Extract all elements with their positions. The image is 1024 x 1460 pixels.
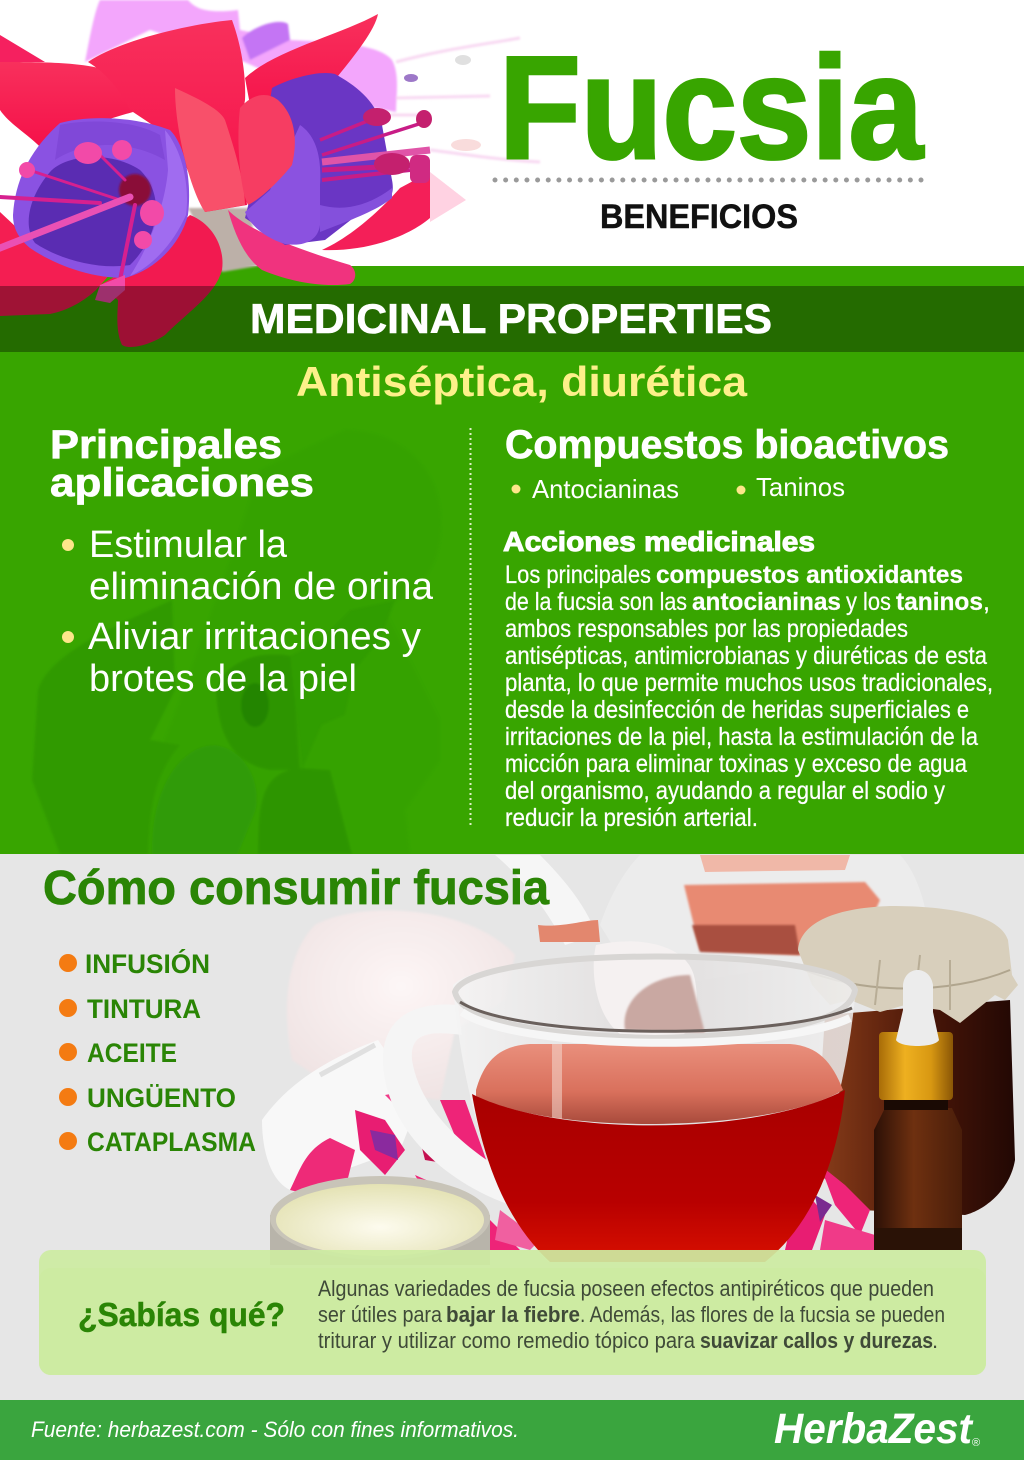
- text block: acciones medicinales: ,: [983, 588, 990, 616]
- heading: principales aplicaciones: [50, 423, 314, 505]
- soft shadow under flowers: [188, 208, 258, 272]
- callout heading: ¿Sabías qué?: [78, 1296, 285, 1333]
- text block: acciones medicinales: antocianinas: [692, 588, 841, 616]
- list: formas de consumo: CATAPLASMA: [87, 1127, 256, 1157]
- text block: acciones medicinales: y los: [846, 588, 891, 616]
- right purple flower: [245, 73, 393, 245]
- callout text: . Además, las flores de la fucsia se pueden: [580, 1302, 945, 1327]
- callout text: suavizar callos y durezas: [700, 1328, 933, 1353]
- right flower anthers: [363, 108, 432, 183]
- white header background: [0, 0, 1024, 266]
- callout text: ser útiles para: [318, 1302, 443, 1327]
- list: formas de consumo: UNGÜENTO: [87, 1083, 236, 1113]
- callout text: bajar la fiebre: [446, 1302, 580, 1327]
- lower bright petal: [228, 210, 355, 285]
- header band: medicinal properties: [0, 286, 1024, 352]
- list: formas de consumo: [59, 948, 256, 1157]
- callout text: .: [932, 1328, 938, 1353]
- cloth bundle: [262, 910, 515, 1190]
- list: aplicaciones: eliminación de orina: [89, 566, 434, 608]
- cup rim: [455, 956, 855, 1038]
- band title: MEDICINAL PROPERTIES: [250, 295, 772, 342]
- left flower stamens: [0, 155, 135, 280]
- callout: sabías qué: [39, 1250, 986, 1375]
- heading: compuestos bioactivos: Compuestos bioactivos: [505, 423, 949, 467]
- list: formas de consumo: INFUSIÓN: [85, 948, 210, 979]
- list: compuestos: Antocianinas: [532, 474, 679, 504]
- dropper bottle: [874, 970, 962, 1250]
- properties subtitle: Antiséptica, diurética: [296, 358, 748, 405]
- green properties panel background: [0, 266, 1024, 854]
- watermark: woman holding toilet roll: [32, 430, 441, 854]
- list: formas de consumo: ACEITE: [87, 1038, 177, 1068]
- text block: acciones medicinales: micción para eliminar toxinas y exceso de agua: [505, 750, 967, 778]
- left flower anthers: [19, 140, 164, 303]
- heading: acciones medicinales: Acciones medicinales: [503, 526, 815, 557]
- title: Fucsia: Fucsia: [499, 26, 925, 189]
- subtitle: Beneficios: BENEFICIOS: [600, 198, 798, 236]
- list: aplicaciones: brotes de la piel: [89, 658, 357, 700]
- list: aplicaciones: Estimular la: [89, 524, 288, 566]
- illustration: tea, bundle, salve, dropper and jar: [262, 855, 1018, 1265]
- paper-topped jar: [798, 906, 1018, 1215]
- red sepals: [0, 35, 45, 62]
- right flower stamens: [320, 118, 430, 180]
- callout text: Algunas variedades de fucsia poseen efectos antipiréticos que pueden: [318, 1276, 934, 1301]
- gray consumption panel background: [0, 854, 1024, 1400]
- vertical dotted divider: [470, 428, 472, 826]
- left purple flower: [13, 118, 189, 278]
- salve tin: [270, 1176, 490, 1265]
- translucent spoon: [594, 941, 697, 1036]
- cup handle: [383, 1004, 516, 1205]
- list: compuestos: Taninos: [756, 472, 845, 502]
- scattered fuchsia petals: [290, 1090, 885, 1250]
- text block: acciones medicinales: ambos responsables por las propiedades: [505, 615, 908, 643]
- tea liquid: [472, 1090, 845, 1262]
- list: aplicaciones: Aliviar irritaciones y: [88, 616, 421, 658]
- text block: acciones medicinales: taninos: [896, 588, 983, 616]
- reflected tea: [476, 1044, 843, 1124]
- heading: principales aplicaciones: aplicaciones: [50, 461, 314, 505]
- glass teapot: [495, 855, 928, 990]
- source note: Fuente: herbazest.com - Sólo con fines informativos.: [31, 1417, 519, 1442]
- text block: acciones medicinales: reducir la presión arterial.: [505, 804, 758, 832]
- text block: acciones medicinales: desde la desinfección de heridas superficiales e: [505, 696, 969, 724]
- illustration: fuchsia flowers: [0, 0, 540, 347]
- back lilac petals: [85, 0, 540, 162]
- center peach petal and bud: [175, 88, 245, 212]
- text block: acciones medicinales: de la fucsia son las: [505, 588, 687, 616]
- text block: acciones medicinales: compuestos antioxidantes: [656, 561, 963, 589]
- faded stamens on white: [390, 38, 540, 162]
- callout text: triturar y utilizar como remedio tópico para: [318, 1328, 696, 1353]
- logo: HerbaZest: ®: [972, 1437, 980, 1449]
- text block: acciones medicinales: [505, 561, 993, 832]
- list: compuestos: [512, 472, 845, 504]
- dotted separator: [495, 178, 921, 182]
- text block: acciones medicinales: del organismo, ayudando a regular el sodio y: [505, 777, 945, 805]
- logo: HerbaZest: HerbaZest: [774, 1405, 974, 1453]
- heading: principales aplicaciones: Principales: [50, 423, 282, 467]
- list: aplicaciones: [62, 524, 434, 700]
- footer: [0, 1400, 1024, 1460]
- list: formas de consumo: TINTURA: [87, 994, 201, 1024]
- callout text: [318, 1276, 945, 1353]
- tea cup: [453, 941, 856, 1262]
- heading: cómo consumir fucsia: Cómo consumir fucsia: [43, 862, 549, 915]
- text block: acciones medicinales: Los principales: [505, 561, 651, 589]
